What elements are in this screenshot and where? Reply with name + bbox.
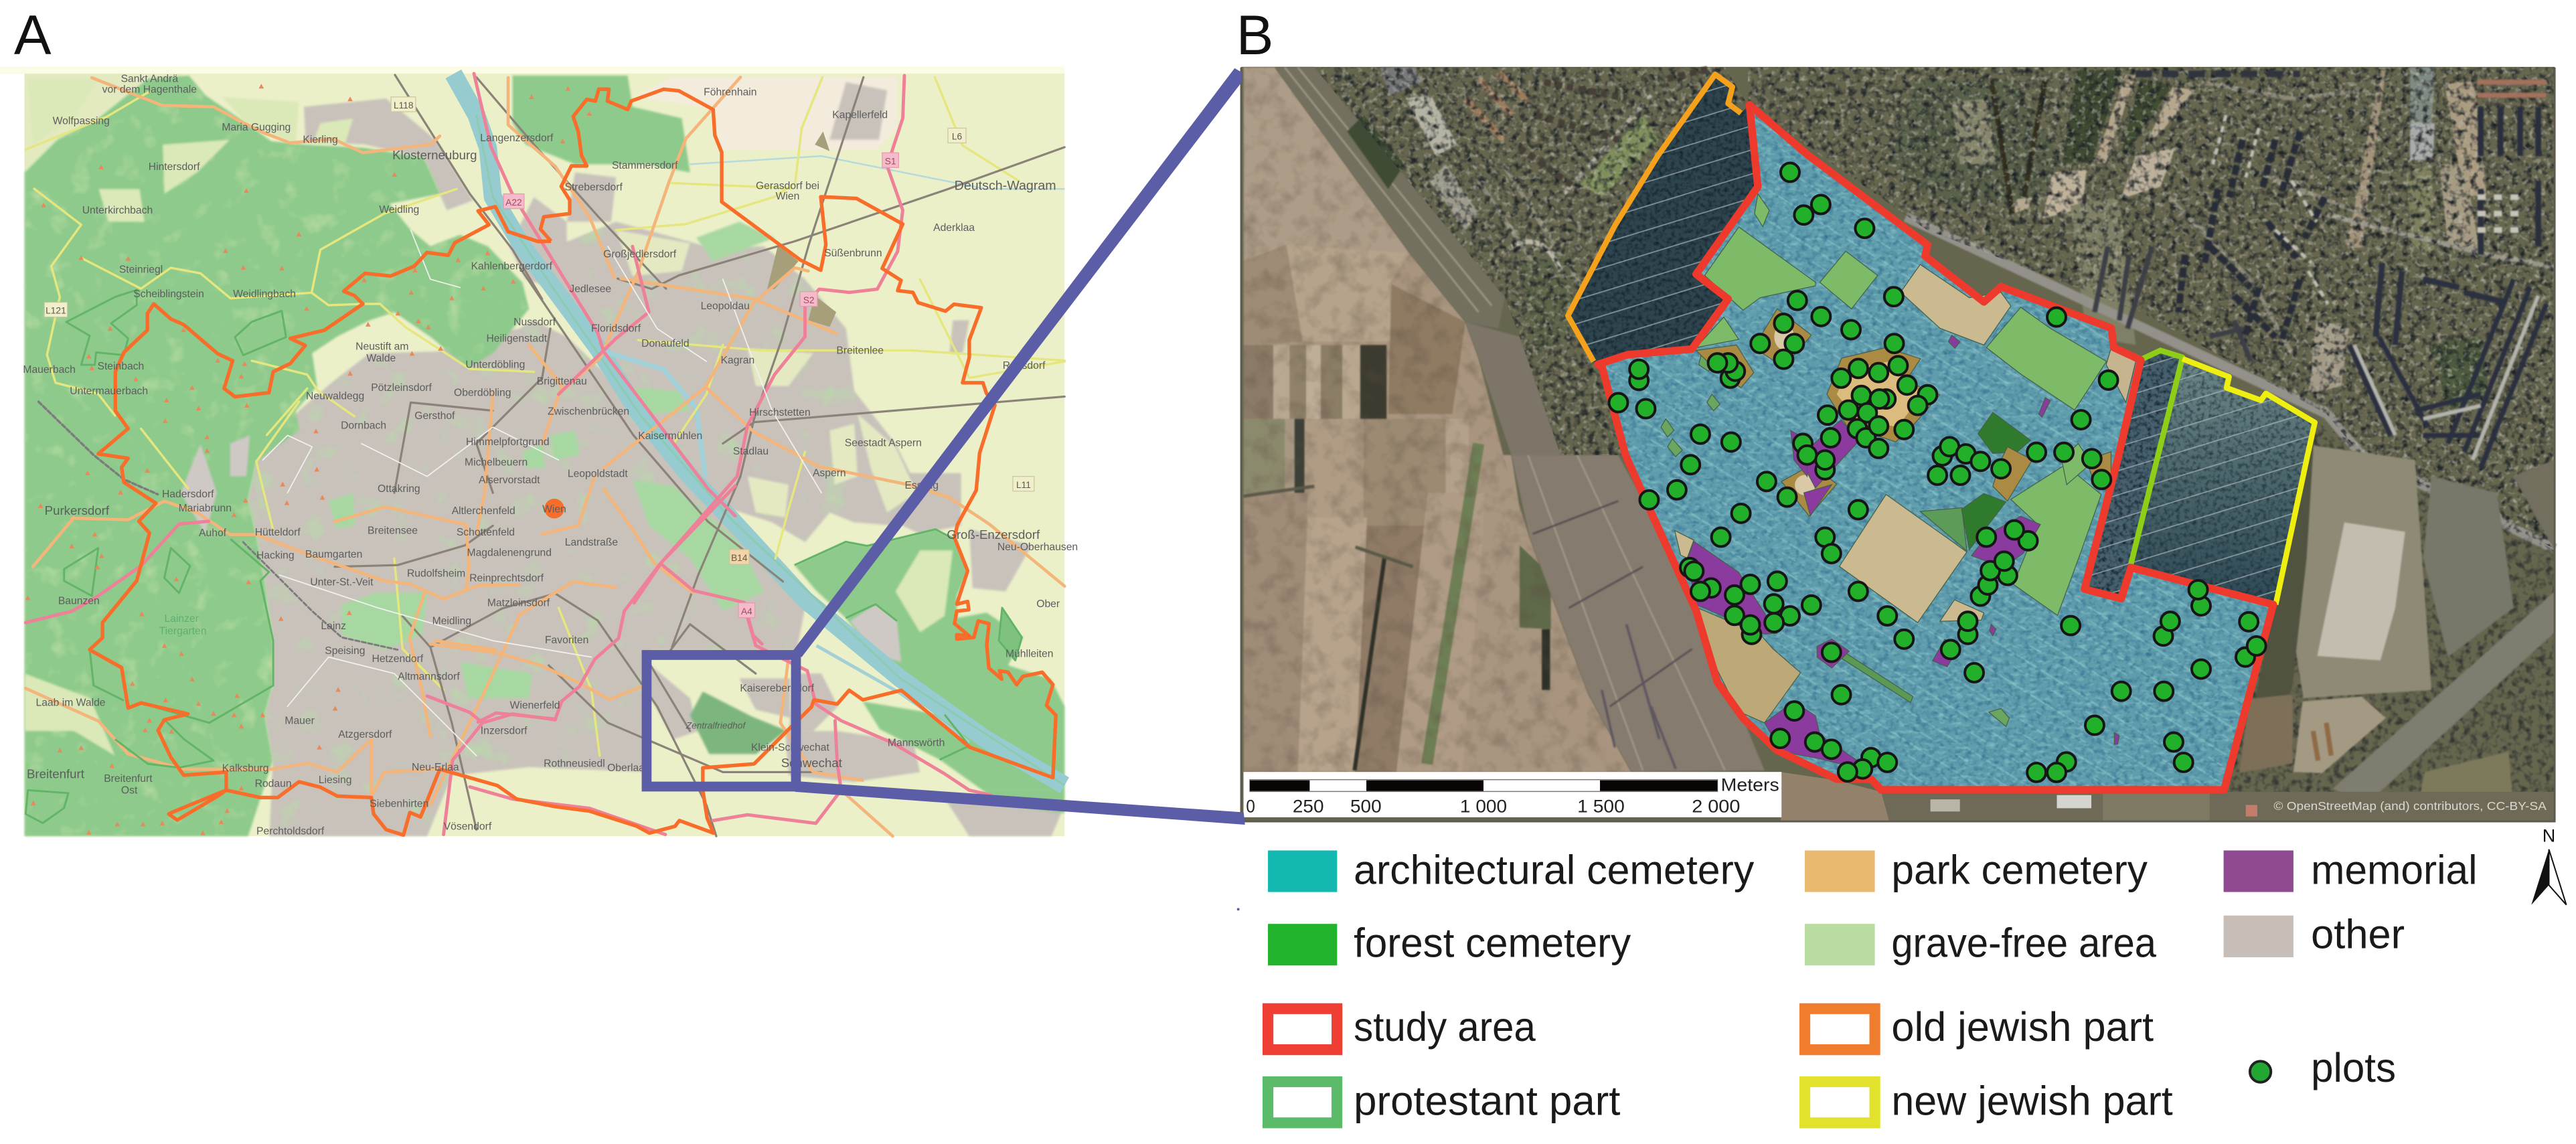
map place labels: Hadersdorf <box>162 489 214 500</box>
cemetery land-use zones <box>1661 194 2136 768</box>
plot markers <box>1609 163 2266 782</box>
white city streets <box>263 230 821 756</box>
map place labels: Essling <box>904 480 939 491</box>
map place labels: Stadlau <box>733 446 769 457</box>
map place labels: Jedlesee <box>569 284 611 295</box>
scale bar: 1 000 <box>1460 797 1507 817</box>
legend <box>1268 847 2478 1125</box>
panel letter B: B <box>1236 3 1273 66</box>
panel A: map of Vienna <box>0 66 1078 837</box>
map place labels: Oberlaa <box>607 762 645 774</box>
orange roads <box>25 77 1064 836</box>
building rows north-east <box>1520 69 2547 468</box>
map place labels: Walde <box>366 353 396 364</box>
urban blocks north-west <box>1347 68 1660 353</box>
new jewish part fill <box>2131 358 2315 604</box>
central cemetery <box>690 691 786 754</box>
road shields: A22 <box>505 197 522 208</box>
other land (beige) <box>1675 264 2136 723</box>
north arrow: N <box>2543 826 2555 846</box>
railway corridor and yard <box>1275 68 1765 772</box>
map place labels: Wien <box>542 504 566 515</box>
Vienna city boundary <box>90 89 1056 835</box>
map place labels: Rothneusiedl <box>544 758 605 770</box>
map place labels: Schwechat <box>781 756 843 770</box>
scale bar: 500 <box>1350 797 1382 817</box>
map place labels: Landstraße <box>565 537 618 548</box>
road shields: A4 <box>741 606 752 617</box>
road shields: S2 <box>803 295 815 305</box>
map place labels: Weidling <box>379 204 419 216</box>
map place labels: Baumgarten <box>305 549 362 560</box>
land south of the cemetery <box>1781 772 2554 821</box>
map place labels: Oberdöbling <box>454 387 511 398</box>
map place labels: Steinbach <box>97 361 144 372</box>
map place labels: Meidling <box>432 616 471 627</box>
map place labels: Atzgersdorf <box>338 729 392 740</box>
map place labels: Raasdorf <box>1003 360 1046 372</box>
forest cemetery <box>1920 412 2030 551</box>
map place labels: Sankt Andrä <box>121 74 178 85</box>
Danube river <box>453 74 1064 785</box>
map place labels: Kagran <box>721 355 754 366</box>
map place labels: Wolfpassing <box>53 115 110 127</box>
legend: other: other <box>2311 911 2405 957</box>
map place labels: Breitenfurt <box>27 766 85 781</box>
map place labels: Perchtoldsdorf <box>256 826 325 837</box>
map place labels: Lainz <box>321 621 346 632</box>
farmland fields <box>1244 68 1631 772</box>
map place labels <box>23 74 1078 837</box>
Wien city centre marker <box>544 499 564 519</box>
dashed railway <box>38 402 158 494</box>
map place labels: Mariabrunn <box>179 503 232 514</box>
legend: park cemetery: park cemetery <box>1891 847 2148 893</box>
map place labels: Strebersdorf <box>564 182 623 193</box>
park cemetery brown patches <box>1696 309 2111 516</box>
scale bar: 2 000 <box>1692 797 1740 817</box>
map place labels: Breitenfurt <box>104 773 153 785</box>
map place labels: Unterkirchbach <box>82 205 153 216</box>
map place labels: Stammersdorf <box>612 160 678 171</box>
map place labels: vor dem Hagenthale <box>102 84 197 96</box>
street network <box>25 74 1064 836</box>
map place labels: Donaufeld <box>641 338 690 349</box>
railways <box>335 75 1064 836</box>
yellow roads <box>25 77 1064 756</box>
map place labels: Tiergarten <box>159 625 207 637</box>
zoom box on map A <box>647 655 796 787</box>
map place labels: Purkersdorf <box>45 503 110 517</box>
map background farmland <box>0 66 1064 836</box>
map place labels: Hacking <box>256 550 295 561</box>
map place labels: Wien <box>776 191 799 202</box>
panel letter A: A <box>14 3 52 66</box>
legend: protestant part: protestant part <box>1354 1078 1620 1125</box>
map place labels: Groß-Enzersdorf <box>947 527 1040 542</box>
map place labels: Untermauerbach <box>70 386 148 397</box>
map place labels: Zentralfriedhof <box>686 720 746 730</box>
map place labels: Alservorstadt <box>479 475 540 486</box>
connector arrow to bottom of panel B <box>795 781 1245 825</box>
road shields: L11 <box>1016 480 1031 490</box>
map place labels: Hetzendorf <box>372 653 424 665</box>
map place labels: Kierling <box>303 135 338 146</box>
map place labels: Ober <box>1036 598 1060 610</box>
scale bar: 250 <box>1293 797 1323 817</box>
map place labels: Kaisermühlen <box>638 430 702 442</box>
memorial areas <box>1687 335 2119 768</box>
pale clearings inside forest <box>25 79 953 756</box>
map place labels: Floridsdorf <box>591 323 641 335</box>
map place labels: Aspern <box>813 468 846 479</box>
map place labels: Laab im Walde <box>35 698 106 709</box>
map place labels: Mauerbach <box>23 364 76 376</box>
map place labels: Süßenbrunn <box>824 248 882 259</box>
map place labels: Baunzen <box>58 596 100 607</box>
legend: memorial: memorial <box>2311 847 2478 893</box>
map place labels: Vösendorf <box>444 821 492 832</box>
map place labels: Kahlenbergerdorf <box>471 260 552 272</box>
map place labels: Leopoldstadt <box>568 468 628 479</box>
scale bar: 1 500 <box>1577 797 1625 817</box>
boundary: new jewish part <box>2182 359 2315 604</box>
map place labels: Föhrenhain <box>704 86 757 98</box>
green and pale patches inside urban areas <box>248 222 920 836</box>
road shields: B14 <box>731 553 748 563</box>
north arrow <box>2531 826 2567 905</box>
road shields: L118 <box>394 100 414 110</box>
study area fill: architectural cemetery <box>1598 105 2273 790</box>
map place labels: Kaiserebersdorf <box>740 683 815 694</box>
map place labels: Altmannsdorf <box>398 671 460 682</box>
map place labels: Scheiblingstein <box>133 289 204 300</box>
map place labels: Brigittenau <box>537 376 587 387</box>
map place labels: Hirschstetten <box>749 407 811 418</box>
map place labels: Unterdöbling <box>465 359 525 371</box>
map place labels: Mauer <box>285 715 315 726</box>
grave-free areas <box>1661 194 2107 726</box>
map place labels: Seestadt Aspern <box>845 437 922 448</box>
legend: old jewish part: old jewish part <box>1891 1004 2154 1050</box>
map place labels: Maria Gugging <box>222 122 291 133</box>
grey area in forest <box>181 435 901 662</box>
urban dark and light speckle <box>1314 68 2555 821</box>
field texture <box>1244 68 1631 772</box>
legend: forest cemetery: forest cemetery <box>1354 920 1631 966</box>
forests <box>25 76 1064 836</box>
legend: study area <box>1268 1004 1536 1050</box>
aerial photo background <box>1241 67 2555 821</box>
scale bar <box>1243 772 1781 817</box>
map place labels: Kalksburg <box>222 763 269 774</box>
map place labels: Reinprechtsdorf <box>469 573 544 584</box>
map place labels: Breitenlee <box>836 345 884 357</box>
map place labels: Pötzleinsdorf <box>371 382 432 394</box>
map place labels: Klein-Schwechat <box>751 742 829 754</box>
boundary: old jewish part <box>1568 74 1741 361</box>
map place labels: Siebenhirten <box>370 799 428 810</box>
forest lighter mottling <box>25 76 529 836</box>
map place labels: Matzleinsdorf <box>487 598 550 609</box>
map place labels: Neustift am <box>355 341 408 353</box>
map place labels: Leopoldau <box>701 301 750 312</box>
map place labels: Rudolfsheim <box>407 568 465 579</box>
map place labels: Nussdorf <box>513 317 556 328</box>
map place labels: Lainzer <box>164 613 199 625</box>
legend: grave-free area: grave-free area <box>1891 920 2157 966</box>
urban blocks north-east <box>1889 68 2555 549</box>
legend: plots: plots <box>2311 1045 2396 1091</box>
map place labels: Weidlingbach <box>233 289 296 300</box>
map place labels: Neu-Oberhausen <box>997 542 1078 553</box>
legend: architectural cemetery: architectural cemetery <box>1354 847 1755 893</box>
legend: plots <box>2250 1045 2396 1091</box>
connector arrow to top of panel B <box>792 68 1242 657</box>
map place labels: Magdalenengrund <box>467 548 552 559</box>
map place labels: Mühlleiten <box>1005 649 1053 660</box>
legend: memorial <box>2224 847 2478 893</box>
forest peak markers <box>25 84 592 835</box>
map place labels: Hintersdorf <box>149 161 200 173</box>
map place labels: Großjedlersdorf <box>603 249 677 260</box>
road shields <box>44 97 1034 618</box>
map place labels: Ost <box>121 785 138 796</box>
map place labels: Gersthof <box>414 410 455 422</box>
map place labels: Deutsch-Wagram <box>955 179 1056 193</box>
map place labels: Schottenfeld <box>457 527 515 538</box>
stray blue dot <box>1237 908 1240 910</box>
map place labels: Unter-St.-Veit <box>310 577 374 588</box>
parks <box>329 222 775 698</box>
map place labels: Gerasdorf bei <box>756 181 819 192</box>
legend: other <box>2224 911 2405 957</box>
copyright note: © OpenStreetMap (and) contributors, CC-BY-SA <box>2273 799 2547 813</box>
map place labels: Wienerfeld <box>510 700 560 711</box>
panel B: aerial view of the cemetery <box>1241 67 2555 821</box>
industrial south-east <box>2239 424 2555 820</box>
protestant part fill <box>2085 350 2182 598</box>
urban areas <box>82 82 1064 836</box>
map place labels: Zwischenbrücken <box>548 406 629 417</box>
map place labels: Ottakring <box>378 483 420 495</box>
map place labels: Speising <box>325 645 365 657</box>
road shields: L6 <box>952 132 963 142</box>
map place labels: Neu-Erlaa <box>412 762 459 773</box>
map place labels: Klosterneuburg <box>392 148 477 162</box>
map place labels: Breitensee <box>368 525 418 537</box>
road shields: S1 <box>885 156 896 166</box>
scale bar: Meters <box>1721 775 1779 795</box>
map place labels: Altlerchenfeld <box>452 505 515 517</box>
map place labels: Hütteldorf <box>255 527 301 538</box>
map place labels: Kapellerfeld <box>832 110 888 121</box>
map place labels: Steinriegl <box>119 264 163 275</box>
legend: study area: study area <box>1354 1004 1536 1050</box>
map place labels: Dornbach <box>341 420 386 432</box>
map place labels: Heiligenstadt <box>486 333 548 344</box>
scale bar: 0 <box>1246 797 1255 817</box>
legend: new jewish part: new jewish part <box>1891 1078 2173 1125</box>
map place labels: Neuwaldegg <box>306 390 364 402</box>
protected-area green outlines <box>25 290 1022 823</box>
pink motorways <box>25 74 991 835</box>
map place labels: Michelbeuern <box>465 457 528 468</box>
road shields: L121 <box>46 306 66 316</box>
map place labels: Inzersdorf <box>481 725 528 736</box>
map place labels: Auhof <box>199 527 227 539</box>
map place labels: Favoriten <box>545 635 588 646</box>
map place labels: Rodaun <box>255 779 292 790</box>
olive allotments <box>767 131 836 327</box>
map place labels: Aderklaa <box>933 222 975 234</box>
boundary: protestant part <box>2131 350 2182 564</box>
boundary: study area <box>1598 105 2273 790</box>
map place labels: Liesing <box>319 774 351 786</box>
map place labels: Langenzersdorf <box>480 133 554 144</box>
map place labels: Mannswörth <box>888 738 945 749</box>
map place labels: Himmelpfortgrund <box>466 436 550 448</box>
old jewish part fill <box>1568 74 1758 365</box>
